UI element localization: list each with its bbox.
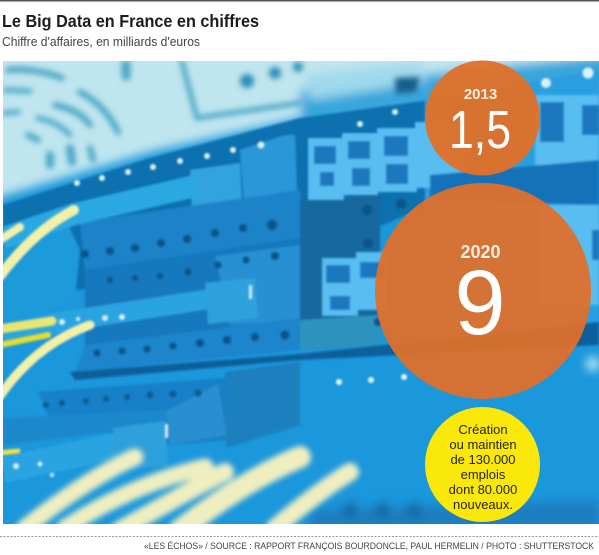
year 2013: 2013 xyxy=(464,86,497,103)
callout text: dont 80.000 xyxy=(449,482,517,497)
value 1,5: 1,5 xyxy=(449,100,511,160)
callout text: de 130.000 xyxy=(450,452,516,467)
callout text: Création xyxy=(458,422,508,437)
callout text: nouveaux. xyxy=(453,497,513,512)
callout text: emplois xyxy=(461,467,506,482)
top rule xyxy=(0,0,599,2)
blue fibre connectors xyxy=(3,186,210,470)
circle: 2020 value xyxy=(375,183,591,399)
upper rack panel xyxy=(3,70,599,372)
screw rows xyxy=(81,199,406,356)
lower rack panel xyxy=(3,362,300,470)
subtitle: Chiffre d'affaires, en milliards d'euros xyxy=(2,34,200,49)
callout text xyxy=(449,422,517,512)
year 2020: 2020 xyxy=(460,242,501,262)
rack slot shadow xyxy=(70,322,599,380)
blurred background top left xyxy=(0,50,599,200)
blurred foreground cables xyxy=(25,457,350,530)
title: Le Big Data en France en chiffres xyxy=(2,11,259,31)
callout text: ou maintien xyxy=(449,437,517,452)
value 9: 9 xyxy=(454,252,506,354)
circle: 2013 value xyxy=(425,60,540,176)
blurred lower right glow xyxy=(310,357,599,530)
circle: jobs callout xyxy=(425,407,540,522)
upper rack indicator lights xyxy=(74,68,594,186)
yellow fibre cables xyxy=(0,210,90,453)
right hand network ports xyxy=(308,95,599,316)
